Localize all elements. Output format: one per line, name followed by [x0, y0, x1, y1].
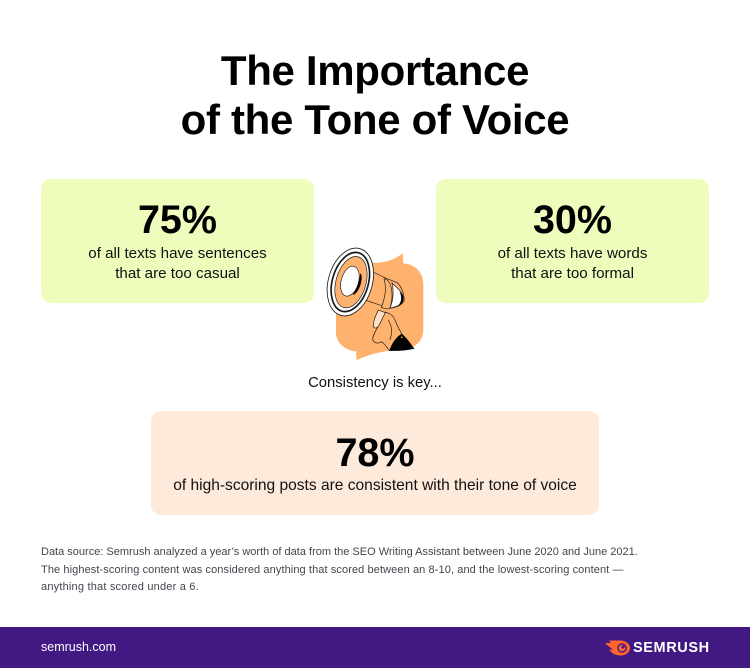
- logo wordmark: SEMRUSH: [633, 640, 710, 656]
- data source note: The highest-scoring content was considered anything that scored between an 8-10, and the lowest-scoring content —: [41, 564, 624, 576]
- data source note: Data source: Semrush analyzed a year’s worth of data from the SEO Writing Assistant between June 2020 and June 2021.: [41, 546, 638, 558]
- stat text: too formal: of all texts have words: [498, 245, 647, 262]
- icon: megaphone held by a hand: [326, 248, 424, 360]
- title: [181, 47, 569, 143]
- logo: Semrush: [605, 640, 710, 656]
- panel: 75% stat: [41, 179, 314, 303]
- stat number: 78%: 78%: [335, 431, 415, 475]
- data source note: anything that scored under a 6.: [41, 581, 199, 593]
- title: of the Tone of Voice: [181, 96, 569, 143]
- footer url: semrush.com: [41, 640, 116, 654]
- stat text: too formal: [498, 245, 647, 282]
- stat text: too casual: that are too casual: [115, 264, 240, 282]
- footer bar: [0, 627, 750, 668]
- panel: 78% stat: [151, 411, 599, 515]
- icon: flame: [605, 640, 630, 656]
- stat number: 30%: 30%: [533, 198, 612, 242]
- stat text: too casual: [88, 245, 267, 282]
- stat text: too formal: that are too formal: [511, 264, 634, 282]
- panel: 30% stat: [436, 179, 709, 303]
- title: The Importance: [221, 47, 529, 94]
- data source note: [41, 546, 638, 593]
- caption: consistency is key: Consistency is key...: [308, 375, 442, 391]
- stat number: 75%: 75%: [138, 198, 217, 242]
- stat text: too casual: of all texts have sentences: [88, 245, 267, 262]
- stat text: consistent tone: of high-scoring posts are consistent with their tone of voice: [173, 477, 577, 494]
